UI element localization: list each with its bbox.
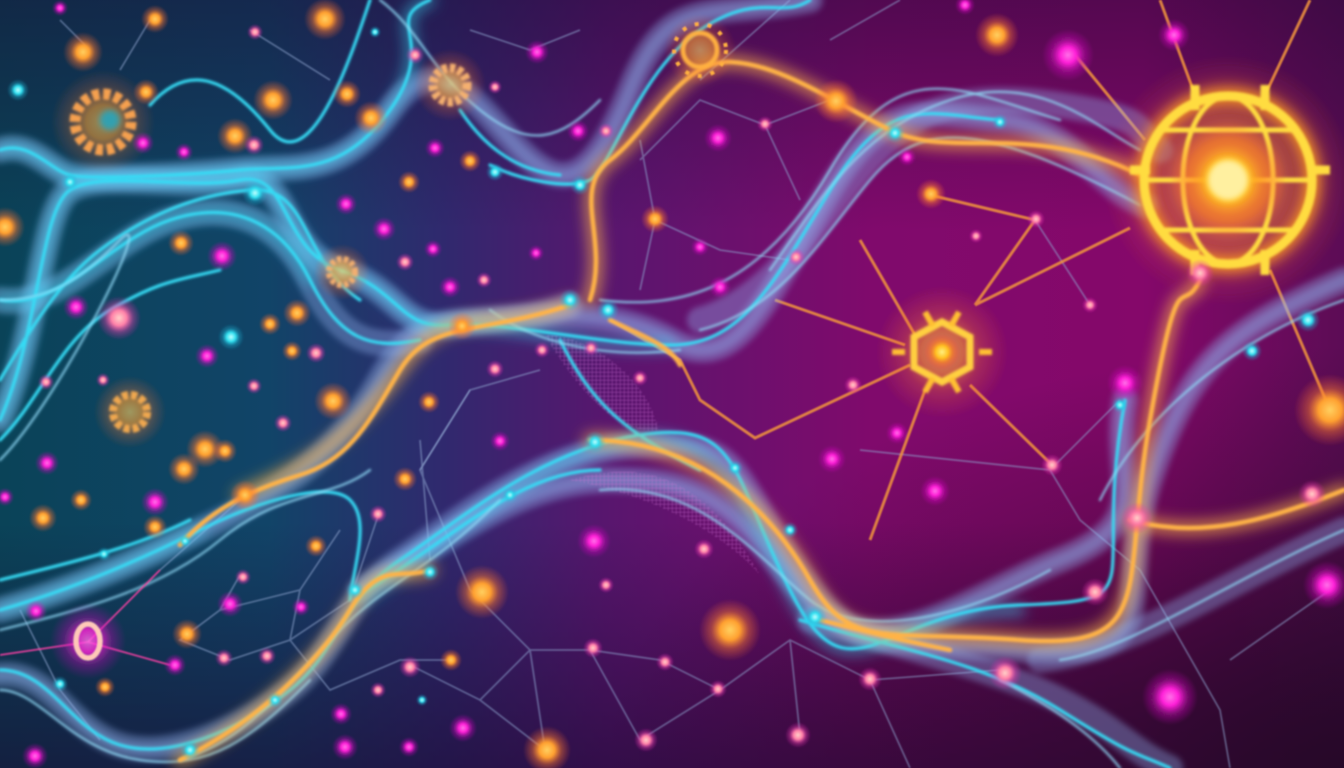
sun node mid left — [314, 244, 370, 300]
orange main pathways — [180, 62, 1344, 760]
sun node top middle — [664, 14, 736, 86]
mesh patches — [545, 335, 760, 575]
sun node top left — [51, 70, 155, 174]
sun node top centre — [414, 49, 486, 121]
hub: hexagon node — [876, 286, 1008, 418]
hub: large yellow node — [1103, 55, 1344, 305]
hub: sun nodes — [0, 14, 736, 679]
orange connector lines — [610, 0, 1330, 540]
pink ring node — [0, 570, 170, 679]
sun node lower left — [94, 376, 166, 448]
